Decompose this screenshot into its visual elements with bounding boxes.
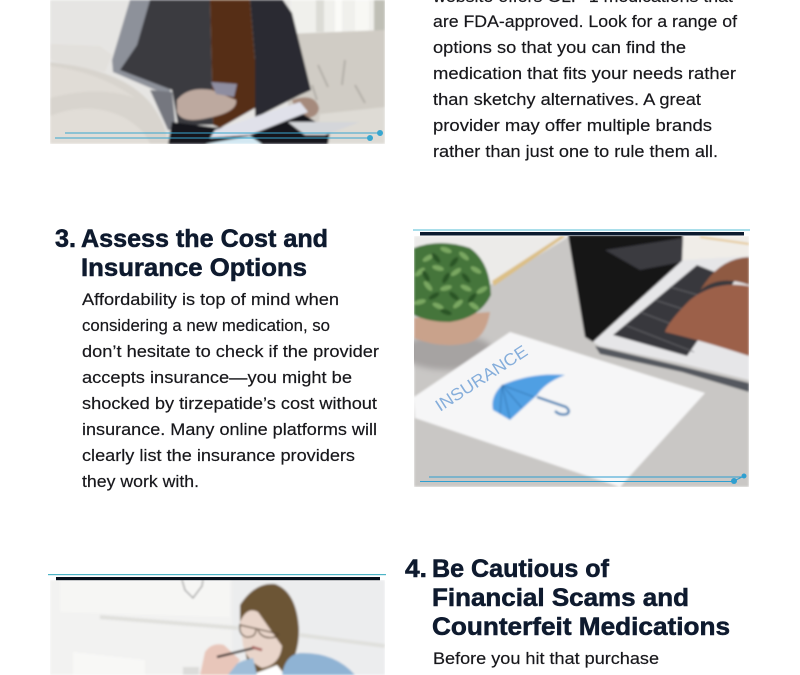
text block: section 3 paragraph: they work with. xyxy=(82,472,199,491)
text block: section 3 paragraph xyxy=(82,290,379,491)
text block: section 3 paragraph: considering a new medication, so xyxy=(82,316,330,335)
accent lines: bottom of insurance photo xyxy=(420,474,746,484)
accent lines: bottom of man photo xyxy=(55,130,383,141)
text block: section 2 closing paragraph: options so that you can find the xyxy=(433,38,686,57)
text block: section 3 paragraph: Affordability is top of mind when xyxy=(82,290,339,309)
heading: section 4: 4. xyxy=(405,555,427,583)
heading: section 4: Financial Scams and xyxy=(432,584,689,612)
heading: section 4: Counterfeit Medications xyxy=(432,613,730,641)
text block: section 3 paragraph: accepts insurance—you might be xyxy=(82,368,352,387)
heading: section 4 xyxy=(405,555,730,641)
accent lines: top of insurance photo xyxy=(413,229,750,236)
photo: woman with glasses holding a pen xyxy=(50,580,385,675)
heading: section 3: Assess the Cost and xyxy=(81,225,328,253)
heading: section 3: Insurance Options xyxy=(81,254,307,282)
photo: man on sofa with phone and papers xyxy=(50,0,385,144)
text block: section 3 paragraph: insurance. Many online platforms will xyxy=(82,420,377,439)
text block: section 3 paragraph: don’t hesitate to check if the provider xyxy=(82,342,379,361)
heading: section 3: 3. xyxy=(55,225,76,253)
accent lines: top of woman photo xyxy=(48,574,386,580)
text block: section 2 closing paragraph: than sketchy alternatives. A great xyxy=(433,90,701,109)
text block: section 3 paragraph: shocked by tirzepatide’s cost without xyxy=(82,394,377,413)
text block: section 2 closing paragraph: are FDA-approved. Look for a range of xyxy=(433,12,737,31)
photo: insurance document, plant and laptop xyxy=(402,235,749,487)
text block: section 2 closing paragraph xyxy=(432,0,737,161)
text block: section 2 closing paragraph: provider may offer multiple brands xyxy=(433,116,712,135)
text block: section 3 paragraph: clearly list the insurance providers xyxy=(82,446,355,465)
text block: section 4 paragraph: Before you hit that purchase xyxy=(433,649,659,668)
text block: section 2 closing paragraph: rather than just one to rule them all. xyxy=(433,142,718,161)
text block: section 2 closing paragraph: medication that fits your needs rather xyxy=(433,64,736,83)
heading: section 4: Be Cautious of xyxy=(432,555,610,583)
heading: section 3 xyxy=(55,225,328,282)
label: INSURANCE on document: INSURANCE xyxy=(432,342,531,415)
